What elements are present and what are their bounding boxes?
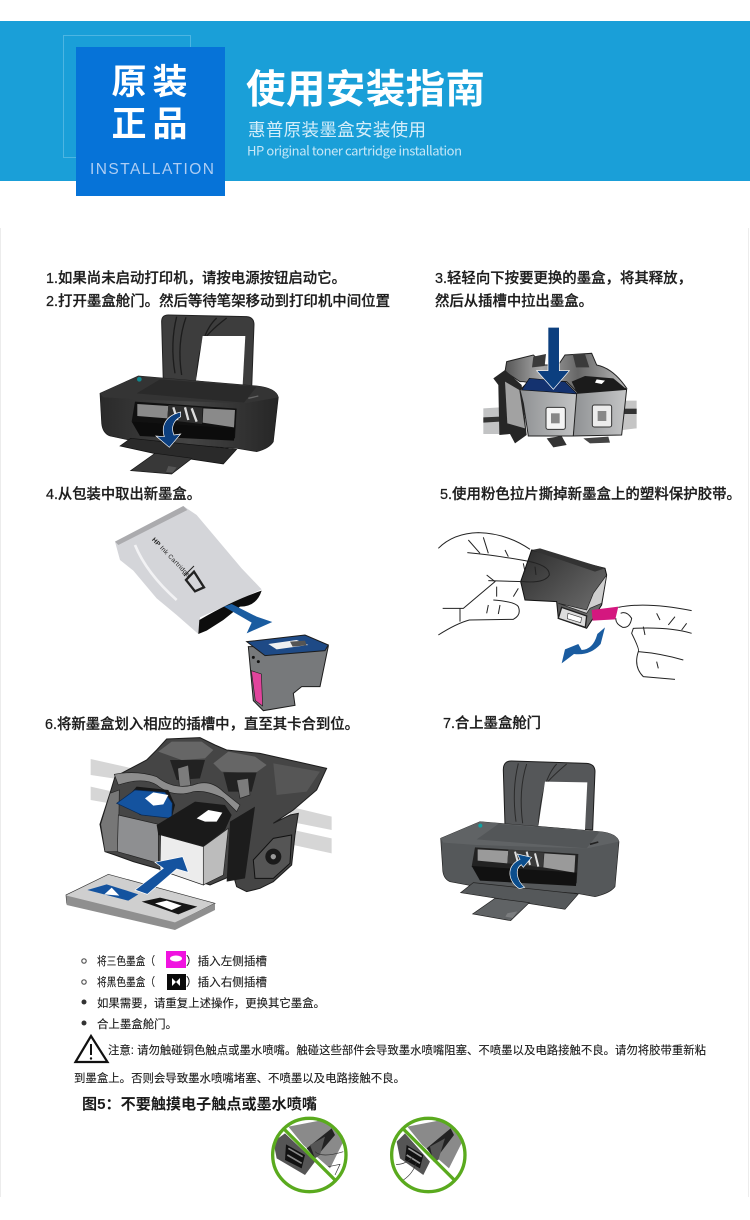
illustration: printer door closed (441, 761, 619, 921)
step 3 text (435, 269, 692, 310)
step 3 text: 3.轻轻向下按要更换的墨盒，将其释放， (435, 269, 692, 287)
subtitle english: HP original toner cartridge installation (247, 140, 462, 160)
illustration: package and arrow: HP Ink Cartridge (150, 537, 191, 579)
arrow: pull direction (562, 627, 605, 663)
badge: genuine product: 正品 (112, 105, 188, 144)
step 3 text: 然后从插槽中拉出墨盒。 (435, 292, 593, 310)
figure 5 heading: 图5：不要触摸电子触点或墨水喷嘴 (82, 1095, 317, 1113)
step 6 text: 6.将新墨盒划入相应的插槽中，直至其卡合到位。 (45, 715, 359, 733)
item: black cartridge: 将黑色墨盒（ (97, 975, 155, 989)
icon: prohibited nozzles (392, 1118, 465, 1192)
subtitle chinese: 惠普原装墨盒安装使用 (248, 120, 426, 140)
item: black cartridge: ）插入右侧插槽 (186, 975, 268, 989)
card: cartridge icons (66, 874, 215, 923)
badge: genuine product (76, 47, 225, 196)
item: black cartridge (82, 974, 268, 990)
header banner (0, 21, 750, 196)
badge: genuine product: 原装 (112, 63, 188, 102)
step 7 text: 7.合上墨盒舱门 (443, 714, 541, 732)
illustration: package and arrow (115, 506, 272, 634)
list: instructions (82, 951, 325, 1031)
hands (438, 533, 692, 679)
step 5 text: 5.使用粉色拉片撕掉新墨盒上的塑料保护胶带。 (440, 485, 741, 503)
arrow: press down (537, 327, 569, 389)
step 4 text: 4.从包装中取出新墨盒。 (46, 485, 201, 503)
caution note: 注意: 请勿触碰铜色触点或墨水喷嘴。触碰这些部件会导致墨水喷嘴阻塞、不喷墨以及电路接触不良。请勿将胶带重新粘 (108, 1043, 706, 1057)
illustration: slide cartridge in (66, 738, 332, 930)
caution note (74, 1043, 706, 1085)
illustration: press cartridge down (483, 327, 637, 447)
illustration: printer with open door (100, 315, 278, 474)
illustration: new cartridge (247, 635, 328, 711)
illustration: remove tape (438, 533, 692, 679)
icon: prohibited contacts (273, 1118, 346, 1192)
arrow: door closes (510, 854, 532, 889)
item: tri-colour cartridge: 将三色墨盒（ (97, 954, 155, 968)
item: tri-colour cartridge (82, 951, 268, 968)
caution note: 到墨盒上。否则会导致墨水喷嘴堵塞、不喷墨以及电路接触不良。 (74, 1071, 405, 1085)
icons: do not touch (273, 1118, 465, 1192)
arrow: door opens (156, 412, 181, 447)
arrow: take out (224, 604, 272, 633)
arrow: slide in (135, 857, 188, 894)
badge: genuine product: INSTALLATION (90, 161, 214, 178)
icon: warning triangle (76, 1036, 108, 1062)
step 1 text: 1.如果尚未启动打印机，请按电源按钮启动它。 (46, 269, 346, 287)
item: repeat: 如果需要，请重复上述操作，更换其它墨盒。 (97, 996, 325, 1010)
title: 使用安装指南 (246, 68, 485, 112)
step 2 text: 2.打开墨盒舱门。然后等待笔架移动到打印机中间位置 (46, 292, 390, 310)
item: close door: 合上墨盒舱门。 (97, 1017, 177, 1031)
item: tri-colour cartridge: ）插入左侧插槽 (186, 954, 268, 968)
